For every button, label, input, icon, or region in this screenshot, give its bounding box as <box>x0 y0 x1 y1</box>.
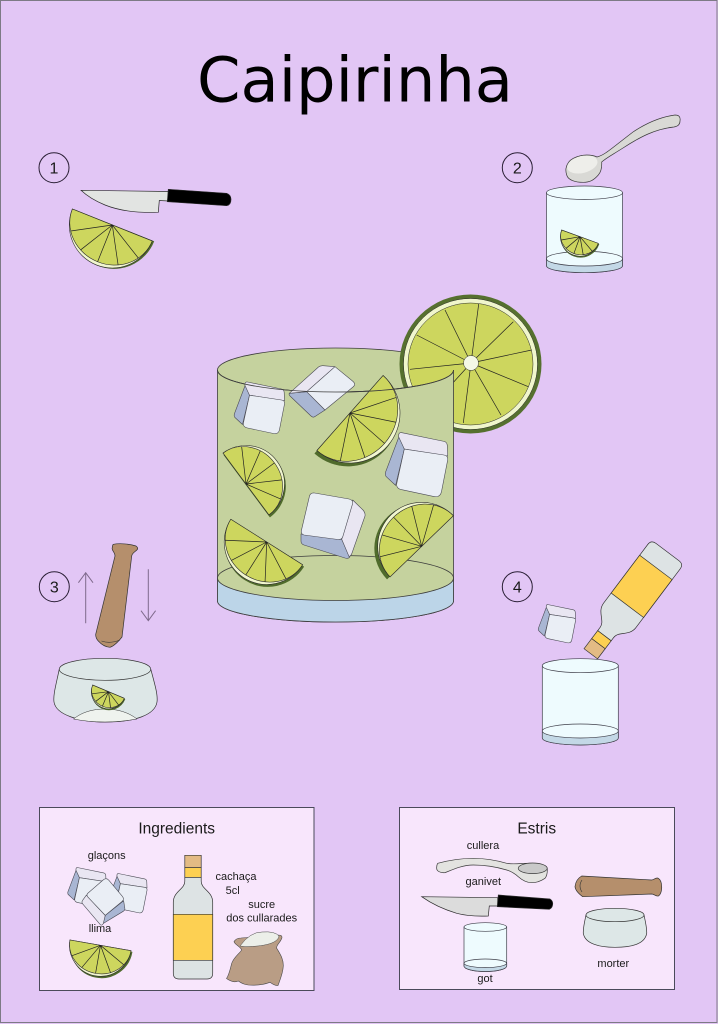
label: cachaça 5cl: cachaça <box>216 871 257 883</box>
icon: bottle pouring <box>575 540 684 666</box>
step number 1: 1 <box>50 160 59 178</box>
label: cullera: cullera <box>467 840 500 852</box>
icon: pestle <box>96 544 138 647</box>
arrow down <box>141 569 156 621</box>
lime wedge upper <box>315 375 421 487</box>
step 1: cutting the lime <box>39 153 231 281</box>
glass body <box>218 370 454 622</box>
ingredients heading: Ingredients <box>138 820 215 837</box>
panel: ingredients <box>40 808 314 990</box>
label: morter: morter <box>597 958 630 970</box>
label: got: got <box>477 973 493 985</box>
glass base <box>218 578 454 622</box>
icon: knife <box>422 895 553 916</box>
label: llima: llima <box>89 923 112 935</box>
icon: ice cube <box>538 605 576 643</box>
arrow up <box>78 573 93 623</box>
icon: pestle <box>575 876 662 897</box>
icon: sugar sack <box>226 932 283 986</box>
lime wedge left <box>223 430 301 517</box>
ice cube top left <box>234 382 285 434</box>
icon: mortar <box>583 908 647 947</box>
estris heading: Estris <box>517 820 556 837</box>
step number 2: 2 <box>513 160 522 178</box>
panel: estris <box>400 808 674 990</box>
label: sucre dos cullarades <box>226 899 298 924</box>
step number 4 <box>502 572 532 602</box>
step 3: muddling <box>39 544 157 722</box>
icon: cachaça bottle <box>173 855 213 979</box>
step 2: adding sugar <box>502 115 680 273</box>
step number 1 <box>39 153 69 183</box>
icon: lime wedge <box>65 940 132 983</box>
step number 3: 3 <box>50 580 59 596</box>
ice cube centre <box>301 493 365 558</box>
label: cachaça 5cl <box>216 871 257 897</box>
central illustration: caipirinha glass <box>208 294 542 622</box>
icon: spoon <box>437 858 547 883</box>
step number 4: 4 <box>513 580 522 596</box>
label: ganivet: ganivet <box>466 876 501 888</box>
step 4: adding ice and cachaça <box>502 540 684 745</box>
icon: lime wedge <box>56 209 154 281</box>
icon: spoon with sugar <box>565 115 680 182</box>
icon: knife <box>81 189 231 212</box>
icon: mortar with lime <box>54 658 157 722</box>
step number 2 <box>502 153 532 183</box>
lime wedge lower left <box>208 519 304 603</box>
ice cube top centre <box>289 366 355 417</box>
ice cube right <box>385 433 448 497</box>
label: sucre dos cullarades: dos cullarades <box>226 912 298 924</box>
icon: ice cubes <box>68 868 147 931</box>
label: glaçons: glaçons <box>88 850 126 862</box>
lime wheel garnish <box>400 294 542 434</box>
icon: glass with lime <box>546 186 622 273</box>
glass back rim <box>218 348 454 392</box>
icon: glass <box>464 923 507 972</box>
glass inner bottom <box>218 556 454 600</box>
label: cachaça 5cl: 5cl <box>226 885 240 897</box>
lime wedge lower right <box>356 484 453 579</box>
title: Caipirinha <box>197 44 513 117</box>
icon: empty glass <box>542 659 618 745</box>
label: sucre dos cullarades: sucre <box>248 899 275 911</box>
step number 3 <box>39 572 69 602</box>
glass front rim line <box>218 370 454 392</box>
